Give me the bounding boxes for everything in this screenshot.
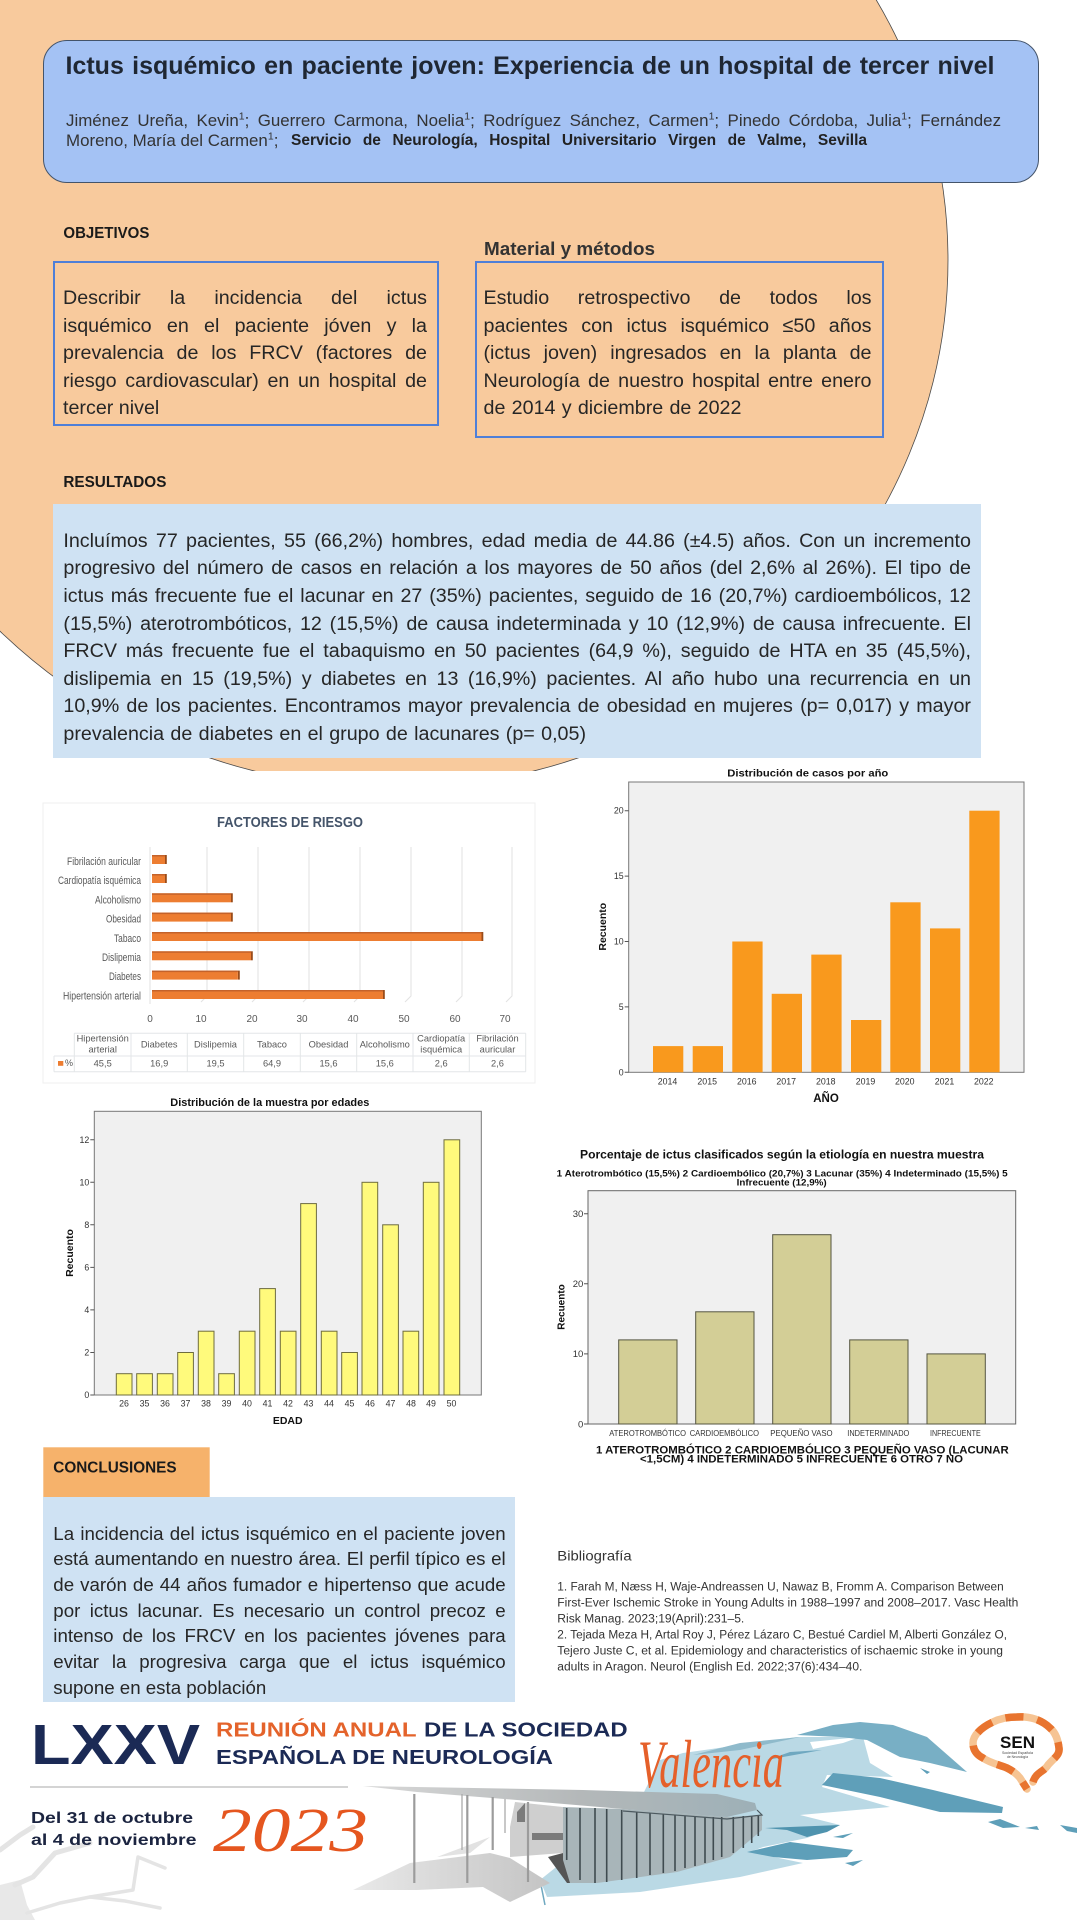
panel: conclusiones: La incidencia del ictus isquémico en el paciente joven xyxy=(53,1522,506,1544)
axis labels: 2016 xyxy=(737,1076,757,1086)
axis labels: 2014 xyxy=(658,1076,677,1086)
heading: objetivos: OBJETIVOS xyxy=(63,225,149,242)
axis labels: 20 xyxy=(573,1279,583,1290)
building roof xyxy=(363,1786,757,1817)
panel: resultados: Incluímos 77 pacientes, 55 (66,2%) hombres, edad media de 44.86 (±4.5) años. Con un incremento xyxy=(63,530,971,552)
data table: 2,6 xyxy=(491,1058,504,1068)
axis labels: 10 xyxy=(80,1177,89,1187)
axis labels: INFRECUENTE xyxy=(930,1429,981,1438)
axis labels: 26 xyxy=(119,1399,129,1409)
axis labels: 2020 xyxy=(895,1076,915,1086)
category labels: Tabaco xyxy=(114,933,141,945)
axis labels: 15 xyxy=(614,871,624,881)
chart subtitle: 1 Aterotrombótico (15,5%) 2 Cardioembólico (20,7%) 3 Lacunar (35%) 4 Indeterminado (15,5%) 5 xyxy=(557,1169,1008,1180)
panel: material y métodos xyxy=(474,260,884,438)
axis values: 20 xyxy=(246,1014,258,1025)
axis labels: 50 xyxy=(447,1399,456,1409)
heading: resultados: RESULTADOS xyxy=(63,474,166,491)
bars xyxy=(116,1140,460,1395)
data table: Obesidad xyxy=(309,1040,348,1050)
bibliography references xyxy=(557,1582,1018,1674)
data table: auricular xyxy=(480,1045,515,1055)
panel: resultados xyxy=(53,504,981,758)
chart: etiología xyxy=(556,1149,1016,1466)
congress name: ESPAÑOLA DE NEUROLOGÍA xyxy=(216,1746,553,1769)
axis values: 70 xyxy=(499,1014,511,1025)
logo: SEN: de Neurología xyxy=(1007,1755,1028,1759)
axis labels: 12 xyxy=(80,1135,89,1145)
heading: material y métodos: Material y métodos xyxy=(484,239,655,259)
horizontal bars xyxy=(152,855,483,999)
chart title: Porcentaje de ictus clasificados según la etiología en nuestra muestra xyxy=(580,1149,985,1161)
logo: SEN xyxy=(973,1717,1059,1789)
category labels: Dislipemia xyxy=(102,952,142,964)
axis labels: PEQUEÑO VASO xyxy=(770,1429,833,1438)
axis labels: 44 xyxy=(324,1399,334,1409)
axis labels xyxy=(573,1209,981,1438)
authors and affiliation: Jiménez Ureña, Kevin1; Guerrero Carmona, Noelia1; Rodríguez Sánchez, Carmen1; Pinedo Córdoba, Julia1; Fernández xyxy=(66,110,1001,130)
data table: 15,6 xyxy=(319,1058,338,1068)
category labels: Alcoholismo xyxy=(95,894,141,906)
illustration: grey tree silhouette xyxy=(0,1827,165,1920)
data table: 15,6 xyxy=(376,1058,394,1068)
data table: Hipertensión xyxy=(77,1034,129,1044)
data table: isquémica xyxy=(420,1045,463,1055)
banner: LXXV reunión anual xyxy=(0,1713,1077,1920)
axis labels xyxy=(80,1135,456,1409)
congress name: REUNIÓN ANUAL xyxy=(216,1718,417,1742)
axis labels: 48 xyxy=(406,1399,416,1409)
axis labels: 43 xyxy=(304,1399,313,1409)
data table xyxy=(54,1033,526,1072)
axis labels: 4 xyxy=(84,1305,89,1315)
congress name: DE LA SOCIEDAD xyxy=(424,1720,628,1742)
axis labels: 8 xyxy=(84,1220,89,1230)
axis labels: 38 xyxy=(201,1399,211,1409)
axis labels: 42 xyxy=(283,1399,293,1409)
bars xyxy=(619,1235,985,1424)
bibliography references: First-Ever Ischemic Stroke in Young Adults in 1988–1997 and 2008–2017. Vasc Health xyxy=(557,1598,1018,1610)
axis labels: 39 xyxy=(222,1399,231,1409)
panel: resultados: dislipemia en 15 (19,5%) y diabetes en 13 (16,9%) pacientes. Al año hubo una recurrencia en un xyxy=(63,668,971,690)
congress dates xyxy=(31,1810,197,1849)
congress dates: Del 31 de octubre xyxy=(31,1810,193,1827)
panel: resultados: 10,9% de los pacientes. Encontramos mayor prevalencia de obesidad en mujeres (p= 0,017) y mayor xyxy=(63,695,971,717)
axis labels: 35 xyxy=(140,1399,149,1409)
axis values: 0 xyxy=(147,1014,153,1025)
building pillars xyxy=(414,1794,528,1883)
chart: factores de riesgo xyxy=(43,803,535,1083)
panel: resultados: FRCV más frecuente fue el tabaquismo en 50 pacientes (64,9 %), seguido de HTA en 35 (45,5%), xyxy=(63,640,971,662)
heading: conclusiones: CONCLUSIONES xyxy=(53,1460,177,1477)
word Valencia: Valencia xyxy=(638,1726,784,1802)
bibliography references: Risk Manag. 2023;19(April):231–5. xyxy=(557,1614,744,1626)
axis labels: 2022 xyxy=(974,1076,994,1086)
data table: 19,5 xyxy=(206,1058,225,1068)
illustration: ground shadow xyxy=(353,1837,550,1902)
category labels: Hipertensión arterial xyxy=(63,990,141,1002)
category labels: Diabetes xyxy=(109,971,141,983)
axis labels: 2019 xyxy=(856,1076,875,1086)
data table: arterial xyxy=(88,1045,117,1055)
axis labels: 46 xyxy=(365,1399,375,1409)
axis labels: 10 xyxy=(614,936,624,946)
data table: Dislipemia xyxy=(194,1040,238,1050)
panel: conclusiones: supone en esta población xyxy=(53,1677,266,1698)
panel: conclusiones: intenso de los FRCV en los pacientes jóvenes para xyxy=(53,1625,506,1646)
panel: material y métodos: (ictus joven) ingresados en la planta de xyxy=(484,342,872,364)
axis labels: 10 xyxy=(573,1349,583,1360)
chart title: Distribución de casos por año xyxy=(727,768,888,780)
axis labels: 30 xyxy=(573,1209,583,1220)
logo: SEN: Sociedad Española xyxy=(1002,1751,1033,1755)
data table: Alcoholismo xyxy=(360,1040,410,1050)
axis values xyxy=(147,1014,511,1025)
header panel: title and authors xyxy=(43,40,1039,183)
panel: material y métodos: pacientes con ictus isquémico ≤50 años xyxy=(484,315,872,337)
bibliography references: Tejero Juste C, et al. Epidemiology and characteristics of ischaemic stroke in young xyxy=(557,1646,1003,1658)
y axis title: Recuento xyxy=(597,903,609,951)
bibliography references: 1. Farah M, Næss H, Waje-Andreassen U, Nawaz B, Fromm A. Comparison Between xyxy=(557,1582,1004,1594)
data table: Cardiopatía xyxy=(417,1034,466,1044)
bibliography xyxy=(557,1548,1018,1674)
title: Ictus isquémico en paciente joven: Experiencia de un hospital de tercer nivel xyxy=(66,52,994,80)
x axis title: AÑO xyxy=(813,1092,839,1105)
axis labels: 2015 xyxy=(697,1076,717,1086)
axis labels: 2017 xyxy=(776,1076,796,1086)
congress dates: al 4 de noviembre xyxy=(31,1832,197,1849)
axis labels: INDETERMINADO xyxy=(847,1429,909,1438)
panel: conclusiones xyxy=(43,1497,515,1702)
panel: resultados: (15,5%) aterotrombóticos, 12 (15,5%) de causa indeterminada y 10 (12,9%) de causa infrecuente. El xyxy=(63,613,971,635)
data table: 2,6 xyxy=(435,1058,448,1068)
panel: conclusiones: de varón de 44 años fumador e hipertenso que acude xyxy=(53,1574,506,1595)
panel: resultados: progresivo del número de casos en relación a los mayores de 50 años (del 2,6% al 26%). El tipo de xyxy=(63,557,971,579)
category labels: Fibrilación auricular xyxy=(67,856,141,868)
illustration: building xyxy=(363,1786,762,1883)
axis labels: 5 xyxy=(619,1002,624,1012)
panel: conclusiones: evitar la progresiva carga que el ictus isquémico xyxy=(53,1651,506,1672)
x axis title: EDAD xyxy=(273,1415,303,1427)
bibliography references: adults in Aragon. Neurol (English Ed. 2022;37(6):434–40. xyxy=(557,1662,862,1674)
congress name xyxy=(216,1718,628,1769)
axis labels: 47 xyxy=(386,1399,395,1409)
chart subtitle: Infrecuente (12,9%) xyxy=(737,1178,827,1189)
category labels xyxy=(58,856,142,1002)
panel: objetivos: prevalencia de los FRCV (factores de xyxy=(63,342,427,364)
axis labels: 0 xyxy=(84,1390,89,1400)
axis labels: 0 xyxy=(619,1067,624,1077)
logo: SEN: SEN xyxy=(1000,1734,1035,1752)
panel: material y métodos: Estudio retrospectivo de todos los xyxy=(484,287,872,309)
authors and affiliation: Servicio de Neurología, Hospital Universitario Virgen de Valme, Sevilla xyxy=(291,132,867,149)
panel: objetivos xyxy=(53,260,439,426)
y axis title: Recuento xyxy=(556,1284,568,1330)
axis values: 10 xyxy=(195,1014,207,1025)
chart subtitle xyxy=(557,1169,1008,1189)
panel: resultados: ictus más frecuente fue el lacunar en 27 (35%) pacientes, seguido de 16 (20,7%) cardioembólicos, 12 xyxy=(63,585,971,607)
data table: 45,5 xyxy=(94,1058,112,1068)
axis labels: 6 xyxy=(84,1262,89,1272)
x axis title: <1,5CM) 4 INDETERMINADO 5 INFRECUENTE 6 OTRO 7 NO xyxy=(640,1454,963,1466)
axis labels: 2021 xyxy=(935,1076,954,1086)
panel: objetivos: Describir la incidencia del ictus xyxy=(63,287,427,309)
axis values: 30 xyxy=(296,1014,308,1025)
y axis title: Recuento xyxy=(64,1229,76,1277)
axis labels: 41 xyxy=(263,1399,272,1409)
illustration: blue watercolour xyxy=(540,1722,1077,1905)
axis labels: 49 xyxy=(426,1399,436,1409)
data table: 16,9 xyxy=(150,1058,168,1068)
data table: 64,9 xyxy=(263,1058,281,1068)
chart title: FACTORES DE RIESGO xyxy=(217,814,363,831)
logotype LXXV: LXXV xyxy=(31,1713,200,1777)
year 2023: 2023 xyxy=(213,1797,368,1865)
panel: conclusiones: por ictus lacunar. Es necesario un control precoz e xyxy=(53,1600,506,1621)
data table: Diabetes xyxy=(141,1040,178,1050)
authors and affiliation xyxy=(66,110,1001,150)
panel: conclusiones: está aumentando en nuestro área. El perfil típico es el xyxy=(53,1548,506,1569)
axis labels: 0 xyxy=(578,1419,583,1430)
axis values: 60 xyxy=(449,1014,461,1025)
axis labels: 36 xyxy=(160,1399,170,1409)
heading: conclusiones xyxy=(43,1447,210,1497)
axis values: 50 xyxy=(398,1014,410,1025)
x axis title: 1 ATEROTROMBÓTICO 2 CARDIOEMBÓLICO 3 PEQUEÑO VASO (LACUNAR xyxy=(596,1443,1009,1456)
chart: distribución de la muestra por edades xyxy=(64,1097,481,1427)
axis labels: 37 xyxy=(181,1399,190,1409)
bars xyxy=(653,811,1000,1072)
bibliography heading: Bibliografía xyxy=(557,1548,632,1564)
category labels: Cardiopatía isquémica xyxy=(58,875,142,887)
axis labels: 45 xyxy=(345,1399,354,1409)
category labels: Obesidad xyxy=(106,914,141,926)
data table: Tabaco xyxy=(257,1040,287,1050)
panel: objetivos: riesgo cardiovascular) en un hospital de xyxy=(63,370,427,392)
data table: Fibrilación xyxy=(476,1034,519,1044)
axis values: 40 xyxy=(347,1014,359,1025)
panel: resultados: prevalencia de diabetes en el grupo de lacunares (p= 0,05) xyxy=(63,723,586,745)
background: peach ellipse xyxy=(0,0,948,788)
chart: distribución de casos por año xyxy=(597,768,1024,1105)
panel: material y métodos: de 2014 y diciembre de 2022 xyxy=(484,397,741,419)
axis labels xyxy=(614,806,994,1086)
axis labels: 40 xyxy=(242,1399,252,1409)
chart title: Distribución de la muestra por edades xyxy=(170,1097,369,1109)
x axis title xyxy=(596,1443,1009,1466)
panel: material y métodos: Neurología de nuestro hospital entre enero xyxy=(484,370,872,392)
axis labels: 2018 xyxy=(816,1076,836,1086)
axis labels: ATEROTROMBÓTICO xyxy=(609,1429,686,1438)
authors and affiliation: Moreno, María del Carmen1; xyxy=(66,130,278,150)
panel: objetivos: tercer nivel xyxy=(63,397,159,419)
axis labels: 2 xyxy=(84,1348,89,1358)
panel: objetivos: isquémico en el paciente jóven y la xyxy=(63,315,427,337)
axis labels: CARDIOEMBÓLICO xyxy=(690,1429,759,1438)
data table: % xyxy=(65,1058,73,1068)
bibliography references: 2. Tejada Meza H, Artal Roy J, Pérez Lázaro C, Bestué Cardiel M, Alberti González O, xyxy=(557,1630,1007,1642)
axis labels: 20 xyxy=(614,806,624,816)
